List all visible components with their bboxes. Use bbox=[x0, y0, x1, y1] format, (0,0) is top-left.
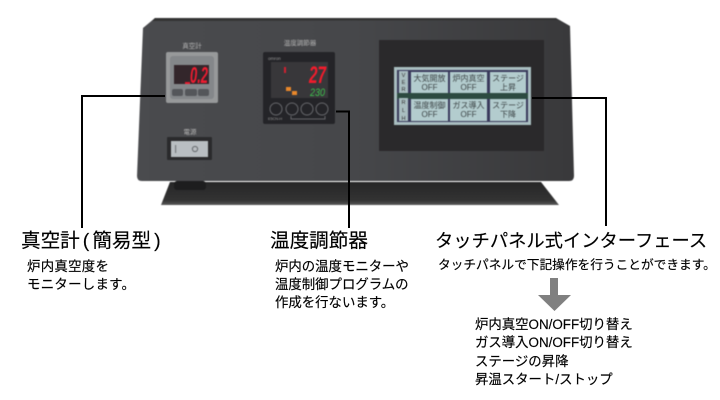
text: temperature controller description: 温度制御プログラムの bbox=[275, 277, 409, 292]
vacuum reading: 0.2 bbox=[190, 62, 208, 88]
leader line: touch panel bbox=[532, 98, 606, 226]
text: temperature controller description: 炉内の温度モニターや bbox=[275, 259, 409, 274]
touch panel screen: R bbox=[401, 100, 406, 106]
text: operations list bbox=[475, 317, 633, 387]
touch panel screen: 大気開放 bbox=[414, 73, 446, 83]
touch panel screen: OFF bbox=[422, 83, 438, 92]
text: touch panel description: タッチパネルで下記操作を行うことができます。 bbox=[438, 258, 716, 272]
enclosure bbox=[137, 18, 574, 181]
stand foot bbox=[174, 181, 206, 190]
touch panel screen: 下降 bbox=[500, 109, 516, 119]
touch panel screen: 炉内真空 bbox=[452, 73, 484, 83]
touch panel screen bbox=[394, 67, 531, 125]
process value: 27 bbox=[308, 62, 327, 89]
touch panel screen: ステージ bbox=[492, 74, 524, 83]
leader line: vacuum gauge bbox=[82, 96, 165, 228]
touch panel bezel bbox=[379, 40, 544, 151]
text: operations list: 炉内真空ON/OFF切り替え bbox=[475, 317, 633, 332]
text: temperature controller description bbox=[275, 259, 409, 310]
vacuum gauge label: 真空計 bbox=[182, 41, 202, 50]
side labels bbox=[399, 71, 408, 121]
temperature controller: E5CN-H bbox=[268, 117, 282, 121]
set value: 230 bbox=[309, 87, 326, 99]
top highlight bbox=[152, 18, 558, 21]
heading: touch panel interface: タッチパネル式インターフェース bbox=[435, 230, 707, 251]
touch panel screen: OFF bbox=[460, 110, 477, 119]
power switch bbox=[167, 137, 212, 160]
touch panel screen: ガス導入 bbox=[452, 100, 484, 110]
touch panel screen: R bbox=[401, 87, 406, 93]
arrow bbox=[538, 278, 571, 311]
stand bbox=[161, 182, 559, 205]
text: vacuum gauge description: モニターします。 bbox=[27, 277, 135, 292]
touch panel screen: V bbox=[402, 73, 406, 79]
touch panel screen: OFF bbox=[422, 110, 438, 119]
text: vacuum gauge description bbox=[27, 259, 135, 292]
touch panel screen: H bbox=[401, 116, 406, 122]
touch panel screen: E bbox=[402, 80, 406, 86]
power label: 電源 bbox=[184, 127, 197, 136]
heading: temperature controller: 温度調節器 bbox=[270, 230, 368, 252]
controller keys bbox=[270, 103, 328, 119]
text: temperature controller description: 作成を行ないます。 bbox=[275, 295, 394, 310]
touch panel screen: ステージ bbox=[492, 101, 524, 110]
touch panel screen: L bbox=[402, 108, 405, 114]
text: vacuum gauge description: 炉内真空度を bbox=[27, 259, 109, 274]
text: operations list: ステージの昇降 bbox=[475, 354, 568, 369]
vacuum gauge bbox=[166, 52, 218, 103]
text: operations list: 昇温スタート/ストップ bbox=[475, 372, 613, 387]
touch panel screen: 上昇 bbox=[500, 83, 516, 92]
text: operations list: ガス導入ON/OFF切り替え bbox=[475, 335, 633, 350]
touch panel screen: 温度制御 bbox=[414, 100, 446, 110]
temperature controller label: 温度調節器 bbox=[284, 38, 317, 47]
temperature controller bbox=[263, 52, 335, 124]
heading: vacuum gauge: 真空計(簡易型) bbox=[21, 230, 161, 252]
temperature controller: omron bbox=[268, 56, 281, 61]
leader line: temperature controller bbox=[336, 112, 349, 228]
touch panel screen: OFF bbox=[460, 83, 477, 92]
screen buttons bbox=[411, 72, 526, 121]
